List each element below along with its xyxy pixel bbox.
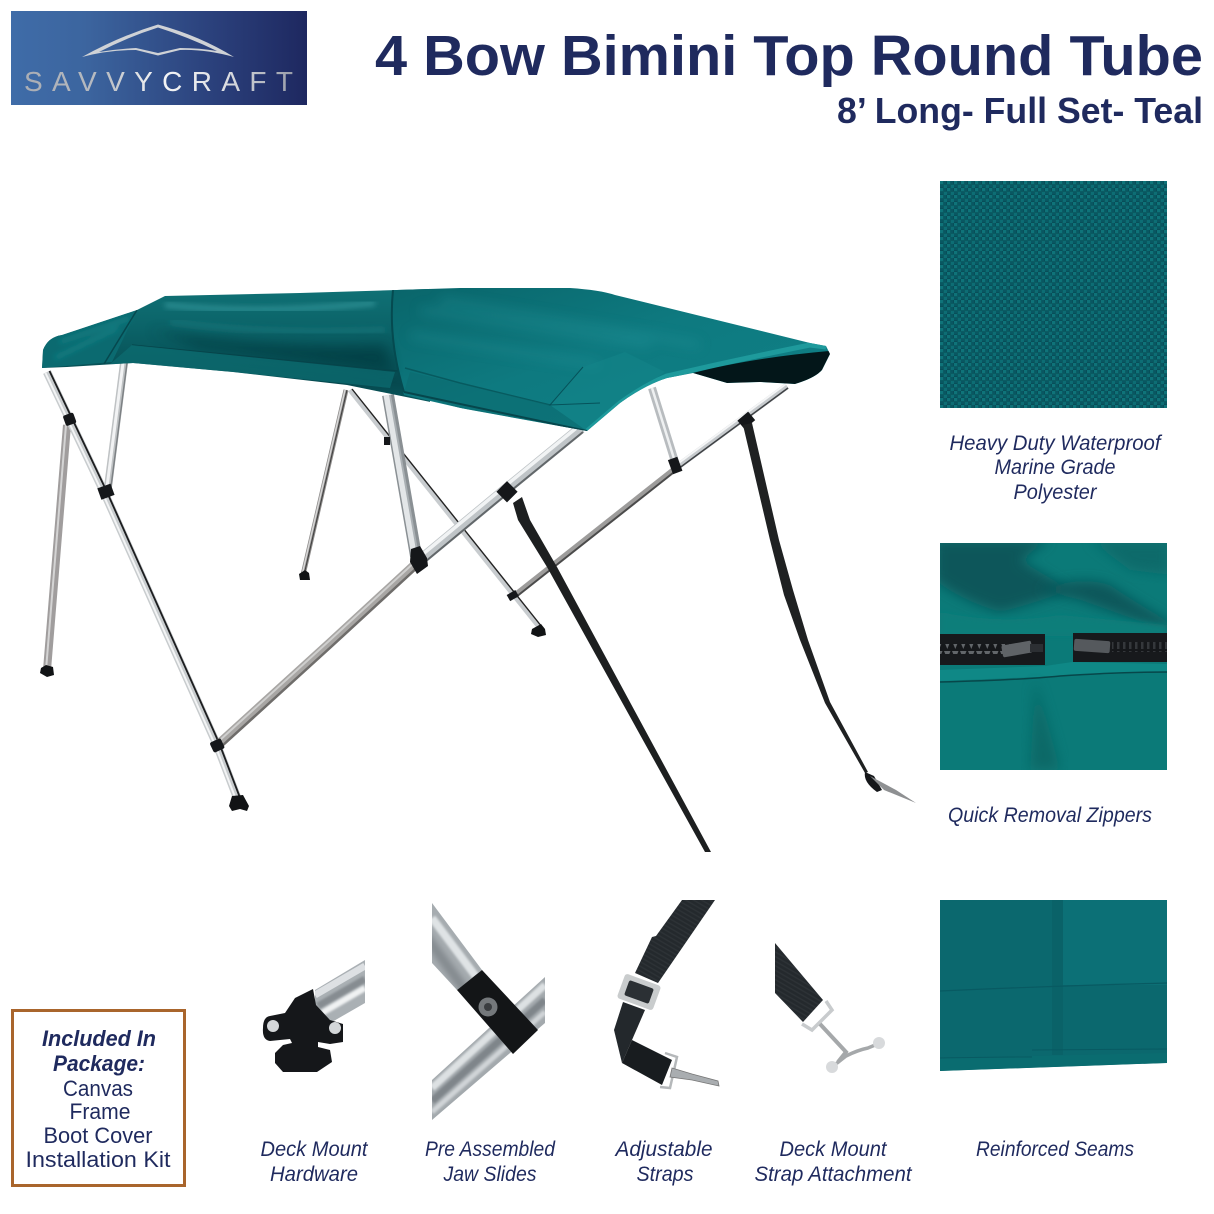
frame: deck feet: [40, 570, 546, 811]
package heading: Included In: [42, 1026, 156, 1051]
main product photo: bimini top: [30, 280, 916, 852]
panel: reinforced seams photo: [940, 900, 1167, 1071]
package heading: Package:: [53, 1051, 145, 1076]
straps: [513, 423, 916, 852]
package list: [26, 1076, 170, 1172]
photo: adjustable strap: [614, 900, 719, 1088]
package list: Boot Cover: [44, 1123, 152, 1148]
photo: pre assembled jaw slide: [425, 900, 547, 1122]
caption: jaw slides: [425, 1138, 556, 1186]
frame: rear tubes: [46, 363, 676, 670]
caption: fabric: [950, 432, 1163, 504]
panel: zippers photo: [935, 540, 1170, 770]
caption: strap attachment: [754, 1138, 913, 1186]
caption: fabric: Marine Grade: [994, 456, 1116, 479]
panel: included in package: [12, 1010, 184, 1186]
photo: deck mount strap attachment: [775, 943, 885, 1073]
zipper right: [1073, 633, 1167, 662]
caption: jaw slides: Jaw Slides: [443, 1163, 537, 1186]
caption: deck mount hardware: Hardware: [270, 1163, 358, 1186]
caption: adjustable straps: Adjustable: [614, 1138, 712, 1161]
caption: fabric: Heavy Duty Waterproof: [950, 432, 1163, 455]
logo wordmark: SAVVYCRAFT: [24, 66, 293, 97]
package list: Canvas: [63, 1076, 133, 1101]
caption: reinforced seams: Reinforced Seams: [976, 1138, 1134, 1161]
subtitle: 8’ Long- Full Set- Teal: [837, 90, 1203, 131]
icon: logo roof mark: [82, 24, 234, 57]
canopy: [42, 288, 830, 431]
frame: front tubes: [46, 371, 788, 801]
package list: Frame: [70, 1099, 130, 1124]
caption: deck mount hardware: Deck Mount: [260, 1138, 369, 1161]
photo: deck mount hardware: [263, 955, 370, 1072]
title: 4 Bow Bimini Top Round Tube: [375, 24, 1203, 88]
caption: jaw slides: Pre Assembled: [425, 1138, 556, 1161]
frame: jaw slide clamps: [63, 412, 755, 753]
caption: fabric: Polyester: [1014, 481, 1097, 504]
caption: strap attachment: Strap Attachment: [754, 1163, 913, 1186]
zipper left: [940, 634, 1045, 665]
caption: adjustable straps: Straps: [636, 1163, 694, 1186]
caption: deck mount hardware: [260, 1138, 369, 1186]
logo: Savvycraft: [11, 11, 307, 105]
package heading: [42, 1026, 156, 1076]
panel: fabric swatch: [940, 181, 1167, 408]
package list: Installation Kit: [26, 1147, 170, 1172]
caption: zippers: Quick Removal Zippers: [948, 804, 1152, 827]
caption: strap attachment: Deck Mount: [780, 1138, 888, 1161]
caption: adjustable straps: [614, 1138, 712, 1186]
